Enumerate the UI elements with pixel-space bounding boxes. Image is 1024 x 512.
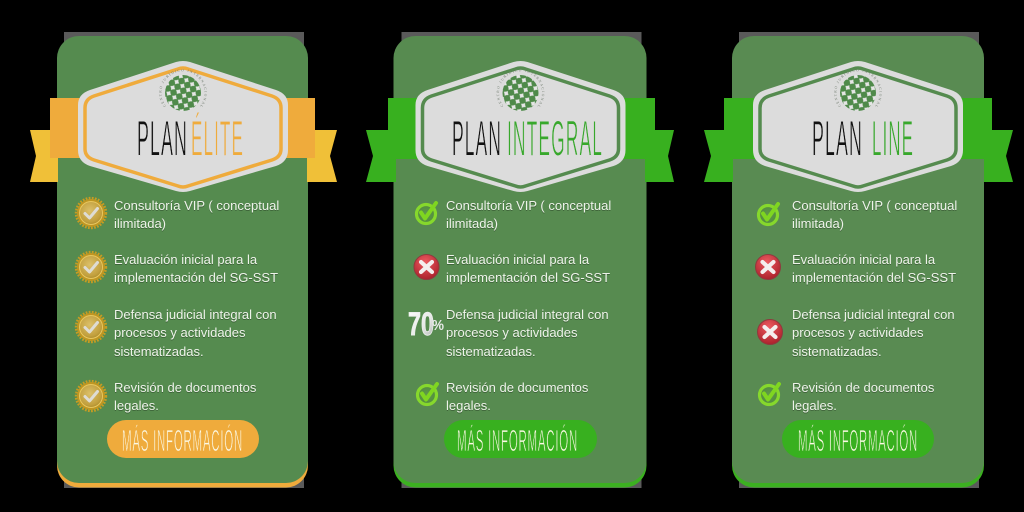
ribbon: [366, 98, 674, 182]
feature text: Consultoría VIP ( conceptual: [792, 198, 957, 213]
feature icon: gold seal: [76, 252, 106, 282]
feature text: ilimitada): [114, 216, 166, 231]
feature icon: gold seal: [76, 198, 106, 228]
feature icon: cross: [756, 254, 780, 280]
feature text: sistematizadas.: [792, 344, 882, 359]
logo globe: CENTRO JURÍDICO INTERNACIONAL S.A.S: [496, 69, 544, 107]
logo globe: [159, 69, 207, 111]
ribbon: [30, 98, 337, 182]
feature text: Defensa judicial integral con: [114, 307, 277, 322]
feature text: Evaluación inicial para la: [114, 252, 258, 267]
feature text: implementación del SG-SST: [446, 270, 610, 285]
feature text: sistematizadas.: [446, 344, 536, 359]
button: [444, 420, 597, 458]
feature icon: check: [760, 384, 779, 404]
feature icon: gold seal: [76, 312, 106, 342]
feature icon: 70 percent: %: [432, 317, 444, 334]
panel: Plan Élite: ÉLITE: [191, 110, 244, 166]
feature text: Revisión de documentos: [114, 380, 257, 395]
feature text: procesos y actividades: [792, 325, 924, 340]
feature text: legales.: [114, 398, 159, 413]
panel: Plan Integral: MÁS INFORMACIÓN: [457, 423, 578, 458]
feature text: Defensa judicial integral con: [446, 307, 609, 322]
feature icon: 70 percent: 70: [408, 306, 434, 342]
badge hexagon: [78, 61, 288, 192]
card background: [394, 32, 646, 488]
logo globe: [834, 69, 882, 111]
panel: Plan Integral: PLAN: [452, 110, 502, 166]
feature text: procesos y actividades: [114, 325, 246, 340]
panel: Plan Line: LINE: [872, 110, 914, 166]
feature icon: cross: [758, 320, 782, 344]
feature text: Evaluación inicial para la: [792, 252, 936, 267]
panel: Plan Line: [704, 32, 1013, 488]
feature text: ilimitada): [792, 216, 844, 231]
feature text: Consultoría VIP ( conceptual: [114, 198, 279, 213]
feature text: Evaluación inicial para la: [446, 252, 590, 267]
feature text: implementación del SG-SST: [792, 270, 956, 285]
panel: Plan Élite: [30, 32, 337, 488]
feature icon: gold seal: [76, 382, 106, 410]
feature icon: check: [416, 203, 436, 224]
feature text: ilimitada): [446, 216, 498, 231]
badge hexagon: [416, 61, 626, 192]
panel: Plan Élite: MÁS INFORMACIÓN: [122, 423, 243, 458]
feature text: implementación del SG-SST: [114, 270, 278, 285]
panel: Plan Integral: [366, 32, 674, 488]
card background: [57, 32, 308, 488]
button: [107, 420, 259, 458]
feature text: sistematizadas.: [114, 344, 204, 359]
button: [782, 420, 934, 458]
feature icon: cross: [414, 254, 439, 280]
panel: Plan Élite: PLAN: [137, 110, 188, 166]
panel: Plan Integral: INTEGRAL: [507, 110, 603, 166]
feature icon: check: [418, 384, 437, 404]
feature text: legales.: [792, 398, 837, 413]
badge hexagon: [753, 61, 963, 192]
feature text: procesos y actividades: [446, 325, 578, 340]
logo globe: [496, 69, 544, 111]
feature text: legales.: [446, 398, 491, 413]
feature text: Consultoría VIP ( conceptual: [446, 198, 611, 213]
feature text: Revisión de documentos: [792, 380, 935, 395]
feature text: Revisión de documentos: [446, 380, 589, 395]
ribbon: [704, 98, 1013, 182]
panel: Plan Line: PLAN: [812, 110, 863, 166]
card background: [732, 32, 984, 488]
feature icon: check: [758, 204, 778, 224]
feature text: Defensa judicial integral con: [792, 307, 955, 322]
logo globe: CENTRO JURÍDICO INTERNACIONAL S.A.S: [834, 69, 882, 107]
